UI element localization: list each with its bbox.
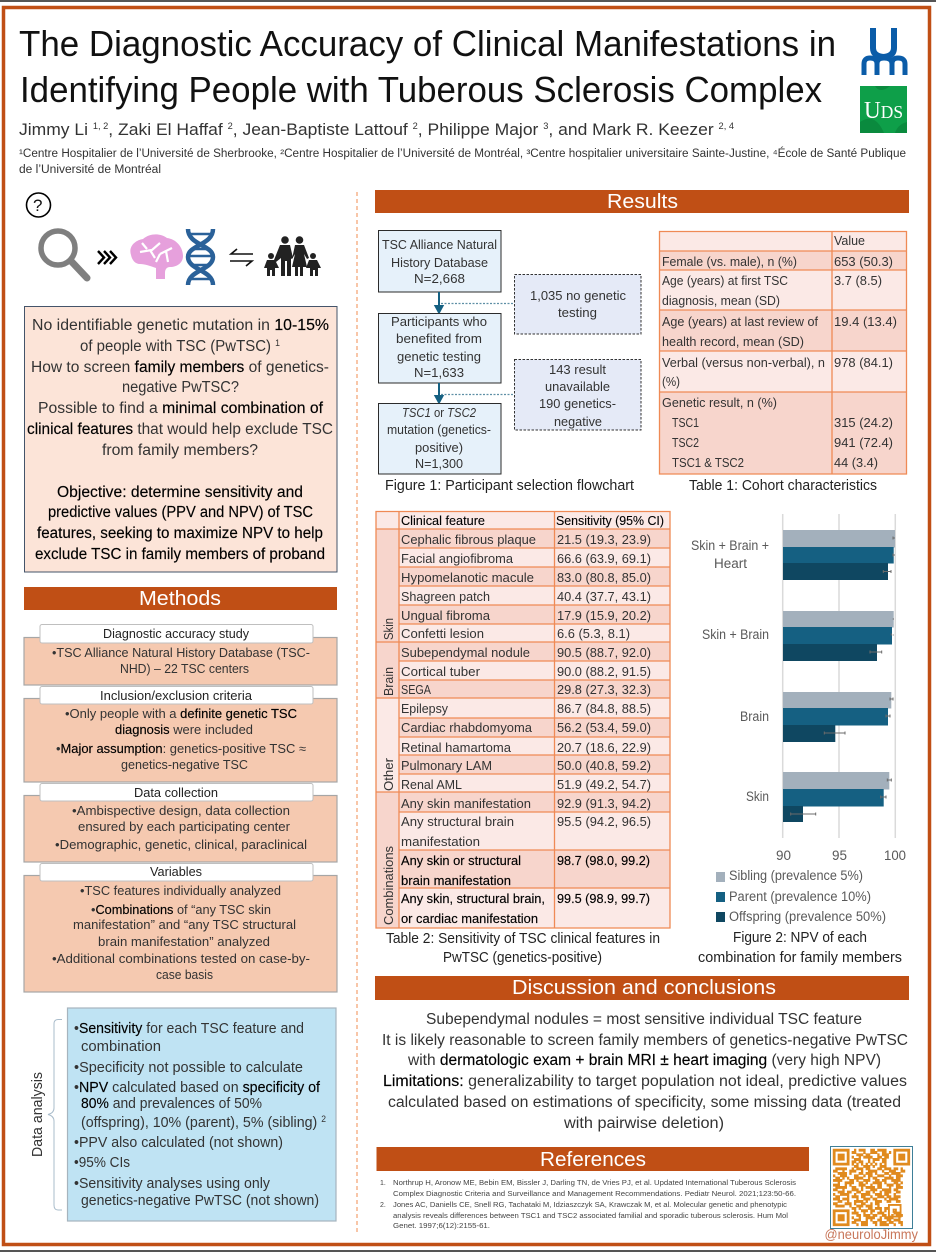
icon: DNA helix bbox=[188, 229, 213, 285]
flow box: no testing bbox=[514, 274, 641, 334]
table 2: 99.5 (98.9, 99.7) bbox=[557, 891, 650, 906]
table 2: Retinal hamartoma bbox=[401, 740, 512, 755]
table 2: Renal AML bbox=[401, 777, 462, 792]
panel: data analysis bbox=[68, 1008, 336, 1221]
dashed column divider bbox=[356, 192, 358, 1235]
panel: objective: clinical features that would help exclude TSC bbox=[27, 421, 333, 438]
table 2: Skin bbox=[381, 618, 396, 640]
panel: diagnostic accuracy study: NHD) – 22 TSC centers bbox=[120, 661, 249, 676]
title: The Diagnostic Accuracy of Clinical Manifestations in bbox=[19, 23, 836, 64]
icon: question mark bbox=[26, 193, 50, 217]
table 2: 98.7 (98.0, 99.2) bbox=[557, 853, 650, 868]
flow box: genetic testing: genetic testing bbox=[397, 349, 481, 364]
table 2: or cardiac manifestation bbox=[401, 911, 538, 926]
text: references: analysis reveals differences between TSC1 and TSC2 associated familial and sporadic tuberous sclerosis. Hum Mol bbox=[393, 1213, 788, 1220]
flow box: genetics-positive: TSC1 or TSC2 bbox=[402, 405, 477, 420]
flow box: genetic testing: benefited from bbox=[396, 331, 482, 346]
flow box: genetic testing bbox=[378, 314, 501, 383]
flow box: database: N=2,668 bbox=[414, 271, 465, 286]
bar chart: NPV bbox=[691, 514, 906, 924]
flow box: no testing: 1,035 no genetic bbox=[530, 288, 626, 303]
table 2: 66.6 (63.9, 69.1) bbox=[557, 551, 651, 566]
table 1: 19.4 (13.4) bbox=[834, 314, 897, 329]
panel: variables: •TSC features individually analyzed bbox=[80, 883, 281, 898]
table 1: TSC2 bbox=[672, 435, 699, 450]
table 2: 92.9 (91.3, 94.2) bbox=[557, 796, 651, 811]
panel: data analysis: (offspring), 10% (parent), 5% (sibling) bbox=[81, 1114, 330, 1131]
panel: data collection: Data collection bbox=[134, 785, 218, 800]
flow box: genetics-positive: positive) bbox=[415, 440, 463, 455]
panel: variables: •Combinations of “any TSC skin bbox=[91, 902, 271, 917]
table 1: 44 (3.4) bbox=[834, 455, 878, 470]
axis labels bbox=[776, 848, 906, 863]
table 1: 3.7 (8.5) bbox=[834, 273, 882, 288]
flow box: unavailable: negative bbox=[554, 414, 602, 429]
authors: 2 bbox=[413, 121, 418, 131]
text: discussion: It is likely reasonable to screen family members of genetics-negative PwTSC bbox=[382, 1032, 908, 1049]
panel: objective: exclude TSC in family members of proband bbox=[35, 546, 325, 563]
heading: references bbox=[376, 1147, 809, 1171]
axis labels: 90 bbox=[776, 848, 791, 863]
panel: objective: of people with TSC (PwTSC) bbox=[80, 338, 278, 355]
table 2: Epilepsy bbox=[401, 701, 448, 716]
panel: data analysis: •NPV calculated based on specificity of bbox=[74, 1079, 321, 1096]
panel: data collection: •Demographic, genetic, clinical, paraclinical bbox=[55, 837, 307, 852]
panel: objective: Possible to find a minimal combination of bbox=[38, 400, 324, 417]
table 2: brain manifestation bbox=[401, 873, 511, 888]
table 2: Sensitivity (95% CI) bbox=[556, 513, 664, 528]
panel: variables: case basis bbox=[156, 967, 213, 982]
category labels: Brain bbox=[740, 709, 769, 724]
table 1: Age (years) at first TSC bbox=[662, 273, 788, 288]
panel: data analysis: •PPV also calculated (not shown) bbox=[74, 1134, 283, 1151]
panel: objective: negative PwTSC? bbox=[122, 379, 239, 396]
affiliations: ¹Centre Hospitalier de l’Université de Sherbrooke, ²Centre Hospitalier de l’Université de Montréal, ³Centre hospitalier universitaire Sainte-Justine, ⁴École de Santé Publique bbox=[19, 147, 906, 160]
panel: objective: features, seeking to maximize NPV to help bbox=[37, 525, 323, 542]
table 2: 56.2 (53.4, 59.0) bbox=[557, 720, 651, 735]
logo: UdS bbox=[860, 86, 907, 133]
panel: data analysis: •Sensitivity for each TSC feature and bbox=[74, 1020, 304, 1037]
caption: table 1: Table 1: Cohort characteristics bbox=[689, 478, 877, 494]
panel: objective: predictive values (PPV and NPV) of TSC bbox=[48, 504, 313, 521]
text: discussion: calculated based on estimations of specificity, some missing data (treated bbox=[388, 1094, 901, 1111]
panel: data analysis: genetics-negative PwTSC (not shown) bbox=[81, 1192, 319, 1209]
logo: Université de Montréal bbox=[864, 28, 905, 75]
table 2: Pulmonary LAM bbox=[401, 758, 492, 773]
text: references: Genet. 1997;6(12):2155-61. bbox=[393, 1223, 490, 1230]
panel: inclusion criteria: •Only people with a definite genetic TSC bbox=[65, 706, 297, 721]
table 2: Any structural brain bbox=[401, 814, 514, 829]
table 2: Confetti lesion bbox=[401, 626, 484, 641]
label: data analysis with brace bbox=[29, 1020, 62, 1210]
text: references: Complex Diagnostic Criteria and Surveillance and Management Recommendations. Pediatr Neurol. 2021;123:50-66. bbox=[393, 1191, 796, 1198]
heading: methods bbox=[24, 587, 337, 610]
table 1: 978 (84.1) bbox=[834, 355, 893, 370]
text: references bbox=[380, 1180, 797, 1230]
title: Identifying People with Tuberous Sclerosis Complex bbox=[20, 69, 822, 110]
table 2: 83.0 (80.8, 85.0) bbox=[557, 570, 651, 585]
table 2: Cephalic fibrous plaque bbox=[401, 532, 536, 547]
text: references: Northrup H, Aronow ME, Bebin EM, Bissler J, Darling TN, de Vries PJ, et al. Updated International Tuberous Sclerosis bbox=[393, 1180, 797, 1187]
panel: variables: brain manifestation” analyzed bbox=[98, 934, 270, 949]
axis labels: 95 bbox=[832, 848, 847, 863]
table 1: Value bbox=[834, 233, 865, 248]
icon: chevrons bbox=[98, 251, 116, 264]
table 2: 29.8 (27.3, 32.3) bbox=[557, 682, 651, 697]
title bbox=[19, 23, 836, 110]
panel: diagnostic accuracy study: •TSC Alliance Natural History Database (TSC- bbox=[52, 645, 310, 660]
authors: 2, 4 bbox=[719, 121, 734, 131]
table 2: SEGA bbox=[401, 682, 431, 697]
caption: table 2: PwTSC (genetics-positive) bbox=[443, 950, 602, 966]
panel: objective: No identifiable genetic mutation in 10-15% bbox=[32, 317, 329, 334]
bars: skin bbox=[783, 772, 889, 822]
flow box: unavailable: 143 result bbox=[549, 362, 606, 377]
arrow: database to tested bbox=[436, 292, 442, 312]
flow box: genetic testing: N=1,633 bbox=[414, 365, 464, 380]
handle: neuroloJimmy: @neuroloJimmy bbox=[824, 1227, 918, 1242]
flow box: unavailable bbox=[514, 360, 641, 430]
table 2: manifestation bbox=[401, 834, 480, 849]
caption: table 2: Table 2: Sensitivity of TSC clinical features in bbox=[386, 931, 660, 947]
panel: diagnostic accuracy study bbox=[24, 624, 337, 685]
error bars bbox=[791, 536, 895, 816]
text: discussion: Subependymal nodules = most sensitive individual TSC feature bbox=[426, 1011, 862, 1028]
QR code bbox=[830, 1146, 912, 1228]
table 2: 90.0 (88.2, 91.5) bbox=[557, 664, 651, 679]
table 2: Hypomelanotic macule bbox=[401, 570, 534, 585]
category labels: Skin bbox=[746, 789, 769, 804]
flow box: genetics-positive: N=1,300 bbox=[415, 456, 463, 471]
panel: variables: Variables bbox=[150, 864, 202, 879]
panel: objective: 1 bbox=[275, 338, 280, 348]
table 1: TSC1 bbox=[672, 415, 699, 430]
affiliations: de l’Université de Montréal bbox=[19, 164, 161, 176]
category labels bbox=[691, 538, 769, 804]
panel: inclusion criteria: Inclusion/exclusion criteria bbox=[100, 688, 253, 703]
authors: , Jean-Baptiste Lattouf bbox=[233, 120, 413, 139]
panel: data analysis: 80% and prevalences of 50% bbox=[81, 1095, 262, 1112]
panel: objective: from family members? bbox=[102, 442, 258, 459]
panel: diagnostic accuracy study: Diagnostic accuracy study bbox=[103, 626, 250, 641]
icon: magnifying glass bbox=[41, 231, 87, 278]
panel: data analysis: 2 bbox=[321, 1114, 326, 1124]
table 2: Cardiac rhabdomyoma bbox=[401, 720, 533, 735]
table 2: Any skin or structural bbox=[401, 853, 521, 868]
table 2: Cortical tuber bbox=[401, 664, 481, 679]
panel: inclusion criteria: diagnosis were included bbox=[115, 722, 253, 737]
text: discussion: with dermatologic exam + brain MRI ± heart imaging (very high NPV) bbox=[407, 1052, 881, 1069]
panel: data analysis: •95% CIs bbox=[74, 1154, 130, 1171]
heading: references: References bbox=[540, 1149, 646, 1171]
table 1: (%) bbox=[662, 374, 680, 389]
panel: data collection bbox=[24, 784, 337, 862]
bars: brain bbox=[783, 692, 891, 742]
table 2: Subependymal nodule bbox=[401, 645, 530, 660]
affiliations bbox=[19, 147, 906, 176]
table 1: Verbal (versus non-verbal), n bbox=[662, 355, 825, 370]
panel: inclusion criteria: genetics-negative TSC bbox=[121, 757, 248, 772]
table 1: 315 (24.2) bbox=[834, 415, 893, 430]
table 2: Combinations bbox=[381, 846, 396, 925]
table 1: TSC1 & TSC2 bbox=[672, 455, 744, 470]
text: discussion: Limitations: generalizability to target population not ideal, predictive values bbox=[383, 1073, 907, 1090]
table 2: 95.5 (94.2, 96.5) bbox=[557, 814, 651, 829]
flow box: genetics-positive: mutation (genetics- bbox=[387, 422, 491, 437]
text: references: 1. bbox=[380, 1180, 386, 1187]
table 2: 6.6 (5.3, 8.1) bbox=[557, 626, 630, 641]
heading: results bbox=[375, 190, 909, 213]
flowchart bbox=[378, 230, 641, 474]
connector: exclusions bbox=[441, 394, 514, 396]
table 2: 90.5 (88.7, 92.0) bbox=[557, 645, 651, 660]
table 2: Clinical feature bbox=[401, 513, 485, 528]
icon: brain bbox=[130, 234, 183, 279]
caption: table 2 bbox=[386, 931, 660, 966]
table 2: 40.4 (37.7, 43.1) bbox=[557, 589, 651, 604]
panel: objective: How to screen family members of genetics- bbox=[31, 359, 329, 376]
table 2: 21.5 (19.3, 23.9) bbox=[557, 532, 651, 547]
table 2: Shagreen patch bbox=[401, 589, 490, 604]
caption: figure 1: Figure 1: Participant selection flowchart bbox=[385, 478, 634, 494]
label: data analysis with brace: Data analysis bbox=[29, 1072, 46, 1157]
authors: , Philippe Major bbox=[418, 120, 543, 139]
category labels: Skin + Brain + bbox=[691, 538, 769, 553]
caption: figure 2: Figure 2: NPV of each bbox=[733, 930, 867, 946]
table 1: Genetic result, n (%) bbox=[662, 395, 777, 410]
panel: variables: •Additional combinations tested on case-by- bbox=[52, 951, 310, 966]
table 2: Facial angiofibroma bbox=[401, 551, 514, 566]
table 1: Female (vs. male), n (%) bbox=[662, 254, 797, 269]
icon: exchange arrows bbox=[230, 249, 253, 266]
table 2: Other bbox=[381, 757, 396, 791]
icon: family bbox=[264, 236, 321, 276]
table 2: 86.7 (84.8, 88.5) bbox=[557, 701, 651, 716]
table 2: Any skin manifestation bbox=[401, 796, 531, 811]
legend bbox=[716, 868, 886, 924]
authors: 2 bbox=[228, 121, 233, 131]
axis labels: 100 bbox=[884, 848, 906, 863]
heading: discussion and conclusions bbox=[375, 976, 909, 1000]
authors: 1, 2 bbox=[93, 121, 108, 131]
authors: , and Mark R. Keezer bbox=[548, 120, 719, 139]
text: references: Jones AC, Daniells CE, Snell RG, Tachataki M, Idziaszczyk SA, Krawczak M, et al. Molecular genetic and phenotypic bbox=[393, 1202, 788, 1209]
table 2 bbox=[376, 511, 670, 928]
panel: data collection: •Ambispective design, data collection bbox=[72, 803, 290, 818]
flow box: database: History Database bbox=[391, 255, 488, 270]
text: references: 2. bbox=[380, 1202, 386, 1209]
caption: figure 2 bbox=[698, 930, 902, 966]
table 1 bbox=[660, 231, 906, 474]
flow box: unavailable: unavailable bbox=[545, 379, 610, 394]
arrow: tested to positive bbox=[436, 383, 442, 402]
category labels: Skin + Brain bbox=[702, 627, 769, 642]
flow box: database bbox=[378, 230, 501, 292]
table 2: 17.9 (15.9, 20.2) bbox=[557, 608, 651, 623]
authors: Jimmy Li bbox=[19, 120, 86, 139]
icon: question mark: ? bbox=[33, 196, 42, 215]
legend: Parent (prevalence 10%) bbox=[729, 889, 871, 904]
panel: data collection: ensured by each participating center bbox=[78, 819, 291, 834]
heading: results: Results bbox=[607, 191, 678, 213]
logo: UdS: UDS bbox=[864, 98, 903, 124]
table 1: diagnosis, mean (SD) bbox=[662, 293, 780, 308]
panel: inclusion criteria: •Major assumption: genetics-positive TSC ≈ bbox=[56, 741, 306, 756]
bars: skin brain bbox=[783, 611, 894, 661]
connector: no genetic testing bbox=[441, 302, 514, 304]
category labels: Heart bbox=[714, 556, 747, 571]
panel: variables: manifestation” and “any TSC structural bbox=[73, 917, 296, 932]
table 2: 20.7 (18.6, 22.9) bbox=[557, 740, 651, 755]
table 2: Brain bbox=[381, 667, 396, 696]
table 2: Any skin, structural brain, bbox=[401, 891, 545, 906]
table 2: 50.0 (40.8, 59.2) bbox=[557, 758, 651, 773]
flow box: no testing: testing bbox=[558, 305, 597, 320]
flow box: genetic testing: Participants who bbox=[391, 314, 487, 329]
authors: , Zaki El Haffaf bbox=[108, 120, 228, 139]
table 1: 941 (72.4) bbox=[834, 435, 893, 450]
table 1: 653 (50.3) bbox=[834, 254, 893, 269]
legend: Sibling (prevalence 5%) bbox=[729, 868, 863, 883]
authors: 3 bbox=[543, 121, 548, 131]
bars: skin brain heart bbox=[783, 530, 895, 580]
table 1: Age (years) at last review of bbox=[662, 314, 818, 329]
panel: data analysis: •Specificity not possible to calculate bbox=[74, 1059, 303, 1076]
panel: data analysis: combination bbox=[81, 1038, 161, 1055]
flow box: unavailable: 190 genetics- bbox=[539, 396, 616, 411]
table 1: health record, mean (SD) bbox=[662, 334, 804, 349]
flow box: database: TSC Alliance Natural bbox=[382, 237, 497, 252]
text: discussion bbox=[382, 1011, 908, 1132]
caption: figure 2: combination for family members bbox=[698, 950, 902, 966]
heading: discussion and conclusions: Discussion and conclusions bbox=[512, 977, 776, 999]
panel: objective: Objective: determine sensitivity and bbox=[57, 484, 303, 501]
text: discussion: with pairwise deletion) bbox=[563, 1115, 724, 1132]
table 2: 51.9 (49.2, 54.7) bbox=[557, 777, 651, 792]
heading: methods: Methods bbox=[139, 588, 221, 610]
panel: objective bbox=[24, 306, 337, 572]
panel: variables bbox=[24, 864, 337, 992]
legend: Offspring (prevalence 50%) bbox=[729, 909, 886, 924]
flow box: genetics-positive bbox=[378, 404, 501, 474]
panel: inclusion criteria bbox=[24, 686, 337, 782]
panel: data analysis: •Sensitivity analyses using only bbox=[74, 1175, 270, 1192]
table 2: Ungual fibroma bbox=[401, 608, 491, 623]
